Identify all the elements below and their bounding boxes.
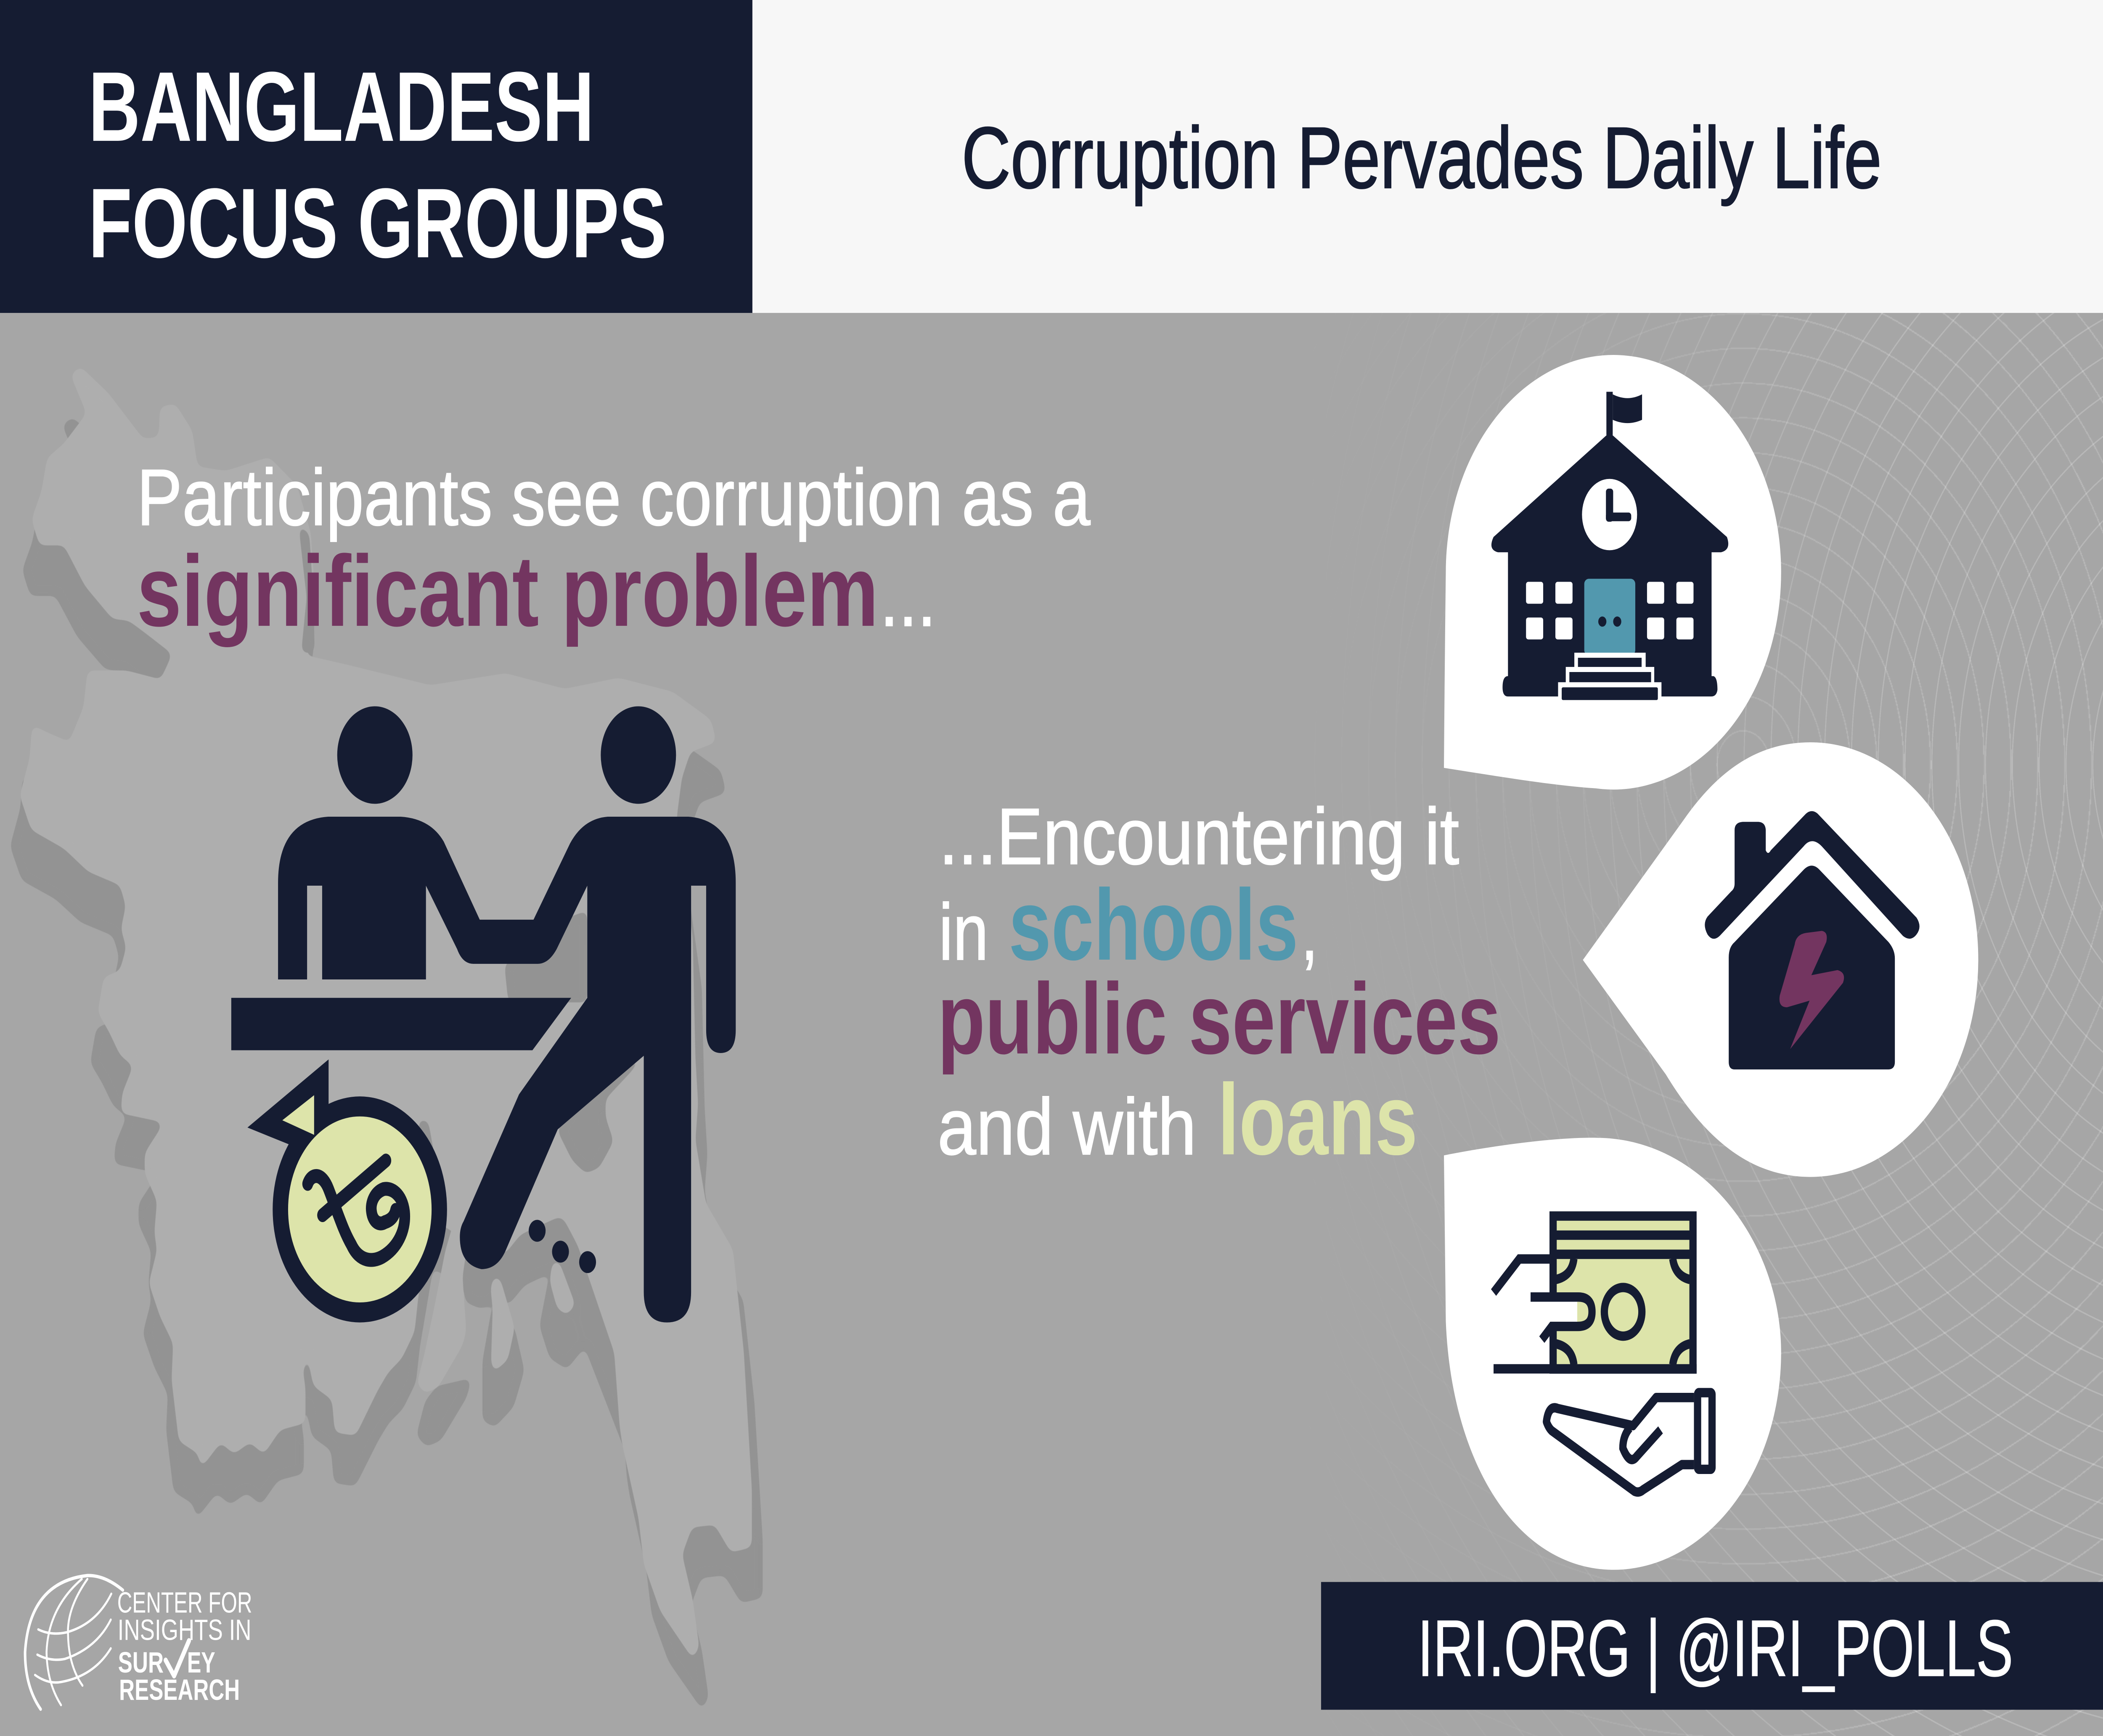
heading: significant problem: Participants see corruption as a: [137, 453, 1091, 542]
logo: Center for Insights in Survey Research: SUR: [118, 1647, 164, 1679]
text: where corruption is encountered: loans: [1218, 1064, 1418, 1176]
header: subtitle panel: [752, 0, 2103, 313]
header: title panel: FOCUS GROUPS: [88, 168, 667, 278]
header: title panel: [0, 0, 752, 313]
text: where corruption is encountered: in: [939, 887, 988, 977]
icon: bribe under the desk: [231, 707, 736, 1323]
text: where corruption is encountered: ...Encountering it: [939, 791, 1459, 881]
heading: significant problem: ...: [880, 553, 936, 643]
icon: money bag with taka symbol: [247, 1059, 447, 1323]
heading: significant problem: [137, 453, 1091, 648]
figures shaking hands: [278, 817, 736, 1323]
icon: school building: [1491, 392, 1728, 700]
text: where corruption is encountered: public services: [938, 963, 1501, 1075]
icon: house with electricity bolt: [1705, 811, 1920, 1069]
icon: trail of dots: [529, 1220, 596, 1273]
text: where corruption is encountered: [938, 791, 1501, 1176]
text: where corruption is encountered: schools: [1009, 869, 1298, 981]
header: title panel: BANGLADESH: [88, 51, 594, 162]
logo: Center for Insights in Survey Research: RESEARCH: [119, 1674, 240, 1707]
map of Bangladesh with shadow: [12, 370, 761, 1706]
logo: Center for Insights in Survey Research: INSIGHTS IN: [118, 1614, 252, 1646]
logo: Center for Insights in Survey Research: CENTER FOR: [117, 1587, 252, 1619]
text: where corruption is encountered: ,: [1301, 887, 1318, 977]
callout: public services bubble: [1583, 742, 1978, 1177]
head of citizen: [601, 707, 676, 804]
callout: schools bubble: [1444, 355, 1781, 789]
header: subtitle panel: Corruption Pervades Daily Life: [961, 110, 1882, 206]
footer bar: website and handle: [1321, 1582, 2103, 1710]
logo check mark: [166, 1641, 189, 1676]
logo globe: [25, 1575, 123, 1709]
callout: loans bubble: [1444, 1138, 1781, 1570]
icon: money changing hands: [1494, 1216, 1712, 1492]
logo: Center for Insights in Survey Research: EY: [187, 1647, 215, 1679]
text: where corruption is encountered: and with: [938, 1082, 1196, 1171]
desk: [231, 998, 571, 1050]
logo: Center for Insights in Survey Research: [25, 1575, 252, 1709]
heading: significant problem: significant problem: [137, 535, 879, 648]
footer bar: website and handle: IRI.ORG | @IRI_POLLS: [1418, 1604, 2013, 1693]
head of official: [337, 707, 413, 804]
